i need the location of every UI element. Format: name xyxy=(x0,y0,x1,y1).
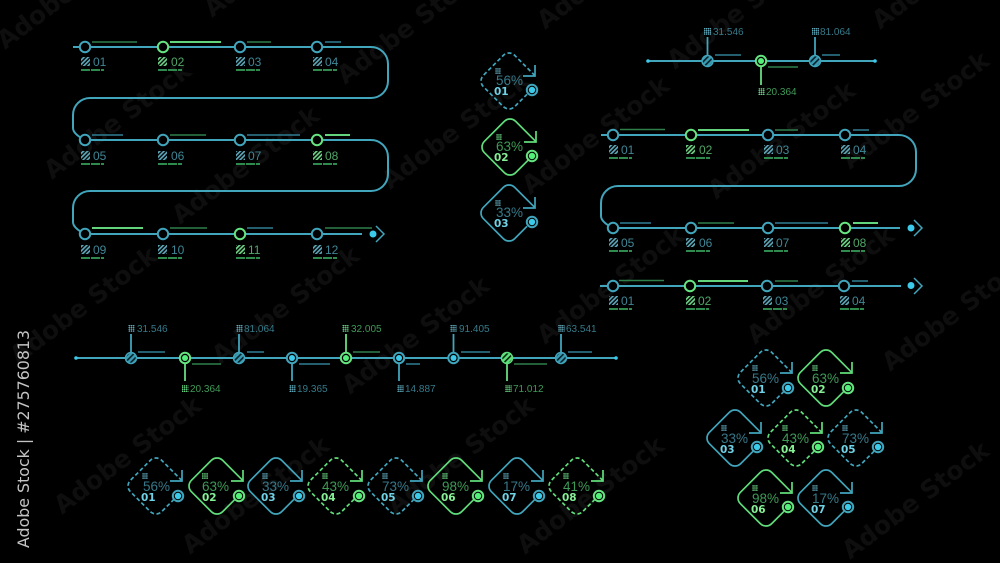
step 02: 02 xyxy=(171,55,185,69)
step 07: 07 xyxy=(776,236,790,250)
step 05 xyxy=(80,135,123,164)
watermark pattern: Adobe Stock xyxy=(836,435,996,563)
panel: badge cluster xyxy=(707,350,883,526)
watermark pattern: Adobe Stock xyxy=(702,75,862,205)
step 03: 03 xyxy=(775,294,789,308)
badge 33% xyxy=(248,458,304,514)
badge 56%: 56% xyxy=(752,371,779,386)
step 01 xyxy=(80,42,137,70)
badge 33%: 03 xyxy=(261,492,276,504)
badge 63% xyxy=(798,350,853,406)
badge 73%: 05 xyxy=(381,492,396,504)
arrow end xyxy=(908,278,922,294)
arrow end xyxy=(370,226,384,242)
step 03 xyxy=(235,42,271,70)
step 07: 07 xyxy=(248,149,262,163)
step 04 xyxy=(312,42,341,70)
badge 17% xyxy=(489,458,544,514)
panel: badge row xyxy=(128,458,604,514)
badge 33% xyxy=(481,185,537,241)
watermark pattern: Adobe Stock xyxy=(176,430,336,560)
badge 43% xyxy=(308,458,364,514)
step 06: 06 xyxy=(699,236,713,250)
snake path xyxy=(73,47,388,234)
marker 32.005: 32.005 xyxy=(351,324,382,335)
step 06 xyxy=(686,223,734,251)
badge 56% xyxy=(738,350,793,406)
badge 73% xyxy=(368,458,423,514)
step 01 xyxy=(608,130,665,158)
step 04: 04 xyxy=(325,55,339,69)
step 08 xyxy=(312,135,350,164)
badge 56% xyxy=(128,458,183,514)
step 08: 08 xyxy=(853,236,867,250)
badge 73%: 73% xyxy=(842,431,869,446)
badge 56%: 01 xyxy=(494,86,509,98)
badge 33%: 33% xyxy=(262,479,289,494)
step 08 xyxy=(840,223,878,251)
panel: long value timeline xyxy=(74,324,618,395)
badge 98%: 06 xyxy=(441,492,456,504)
badge 63%: 63% xyxy=(496,139,523,154)
watermark pattern: Adobe Stock xyxy=(166,100,326,230)
step 02 xyxy=(686,130,749,158)
badge 98% xyxy=(428,458,483,514)
marker 32.005 xyxy=(341,324,382,363)
panel: single-row timeline xyxy=(600,278,922,309)
badge 73%: 05 xyxy=(841,444,856,456)
step 04: 04 xyxy=(852,294,866,308)
badge 17% xyxy=(798,470,853,526)
step 03: 03 xyxy=(776,143,790,157)
badge 56%: 01 xyxy=(141,492,156,504)
badge 43% xyxy=(768,410,823,466)
badge 73%: 73% xyxy=(382,479,409,494)
marker 20.364: 20.364 xyxy=(190,384,221,395)
badge 43%: 04 xyxy=(781,444,796,456)
badge 43%: 43% xyxy=(322,479,349,494)
marker 14.887: 14.887 xyxy=(405,384,436,395)
badge 33% xyxy=(707,410,762,466)
marker 31.546 xyxy=(126,324,168,364)
snake path xyxy=(601,135,916,228)
badge 33%: 03 xyxy=(720,444,735,456)
watermark pattern: Adobe Stock xyxy=(48,390,208,520)
badge 63%: 02 xyxy=(494,152,509,164)
step 08: 08 xyxy=(325,149,339,163)
marker 81.064: 81.064 xyxy=(820,27,851,38)
badge 63%: 02 xyxy=(811,384,826,396)
watermark pattern: Adobe Stock xyxy=(531,220,691,350)
badge 63% xyxy=(482,119,537,175)
watermark pattern: Adobe Stock xyxy=(741,220,901,350)
badge 56%: 56% xyxy=(143,479,170,494)
badge 63%: 63% xyxy=(202,479,229,494)
watermark pattern: Adobe Stock xyxy=(38,55,198,185)
marker 91.405: 91.405 xyxy=(459,324,490,335)
marker 91.405 xyxy=(448,324,490,363)
marker 31.546 xyxy=(702,27,744,66)
marker 20.364 xyxy=(180,353,221,395)
axis line xyxy=(646,59,877,63)
marker 31.546: 31.546 xyxy=(713,27,744,38)
step 11 xyxy=(235,228,273,258)
watermark pattern: Adobe Stock xyxy=(511,430,671,560)
step 05: 05 xyxy=(93,149,107,163)
badge 98%: 98% xyxy=(752,491,779,506)
panel: three stacked badges xyxy=(481,53,537,241)
step 04: 04 xyxy=(853,143,867,157)
step 03 xyxy=(762,281,798,309)
step 03 xyxy=(763,130,798,158)
watermark pattern: Adobe Stock xyxy=(376,65,536,195)
step 07 xyxy=(763,223,828,251)
badge 33%: 33% xyxy=(721,431,748,446)
step 04 xyxy=(839,281,868,309)
marker 31.546: 31.546 xyxy=(137,324,168,335)
step 12 xyxy=(312,228,372,258)
badge 63% xyxy=(189,458,244,514)
step 06 xyxy=(158,135,206,164)
marker 20.364 xyxy=(756,56,798,98)
step 02 xyxy=(685,281,748,309)
marker 71.012: 71.012 xyxy=(513,384,544,395)
arrow end xyxy=(908,220,922,236)
panel: two-row snake timeline xyxy=(601,130,922,251)
badge 17%: 17% xyxy=(503,479,530,494)
step 01 xyxy=(608,280,664,309)
marker 14.887 xyxy=(394,353,436,395)
badge 73% xyxy=(828,410,883,466)
step 10 xyxy=(158,228,207,258)
badge 33%: 33% xyxy=(496,205,523,220)
watermark pattern: Adobe Stock xyxy=(336,270,496,400)
marker 81.064: 81.064 xyxy=(244,324,275,335)
badge 63%: 02 xyxy=(202,492,217,504)
marker 81.064 xyxy=(810,27,851,66)
badge 17%: 17% xyxy=(812,491,839,506)
badge 17%: 07 xyxy=(502,492,517,504)
step 01: 01 xyxy=(621,143,635,157)
watermark pattern: Adobe Stock xyxy=(206,240,366,370)
watermark pattern: Adobe Stock xyxy=(516,70,676,200)
panel: short value timeline xyxy=(646,27,877,98)
badge 56%: 56% xyxy=(496,73,523,88)
badge 41%: 08 xyxy=(562,492,577,504)
badge 56% xyxy=(481,53,537,109)
marker 81.064 xyxy=(234,324,275,364)
badge 43%: 43% xyxy=(782,431,809,446)
step 11: 11 xyxy=(248,243,261,257)
badge 98%: 06 xyxy=(751,504,766,516)
step 02: 02 xyxy=(698,294,712,308)
step 02: 02 xyxy=(699,143,713,157)
step 01: 01 xyxy=(621,294,635,308)
axis line xyxy=(74,356,618,360)
watermark pattern: Adobe Stock xyxy=(836,45,996,175)
panel: three-row snake timeline xyxy=(73,42,388,258)
step 05: 05 xyxy=(621,236,635,250)
badge 98%: 98% xyxy=(442,479,469,494)
step 03: 03 xyxy=(248,55,262,69)
step 09: 09 xyxy=(93,243,107,257)
badge 98% xyxy=(738,470,793,526)
badge 63%: 63% xyxy=(812,371,839,386)
watermark pattern: Adobe Stock xyxy=(4,240,164,370)
vertical stock id text: Adobe Stock | #275760813 xyxy=(14,330,33,548)
step 09 xyxy=(80,228,143,258)
badge 41% xyxy=(549,458,604,514)
step 07 xyxy=(235,135,300,164)
step 01: 01 xyxy=(93,55,107,69)
marker 63.541: 63.541 xyxy=(566,324,597,335)
badge 43%: 04 xyxy=(321,492,336,504)
marker 63.541 xyxy=(556,324,597,364)
step 12: 12 xyxy=(325,243,339,257)
marker 71.012 xyxy=(502,352,547,395)
marker 20.364: 20.364 xyxy=(766,87,797,98)
badge 17%: 07 xyxy=(811,504,826,516)
step 10: 10 xyxy=(171,243,185,257)
badge 41%: 41% xyxy=(563,479,590,494)
marker 19.365 xyxy=(287,353,330,395)
step 06: 06 xyxy=(171,149,185,163)
axis line xyxy=(600,285,901,287)
step 05 xyxy=(608,223,651,251)
step 02 xyxy=(158,42,221,70)
step 04 xyxy=(840,130,869,158)
badge 33%: 03 xyxy=(494,218,509,230)
badge 56%: 01 xyxy=(751,384,766,396)
watermark pattern: Adobe Stock xyxy=(381,390,541,520)
marker 19.365: 19.365 xyxy=(297,384,328,395)
